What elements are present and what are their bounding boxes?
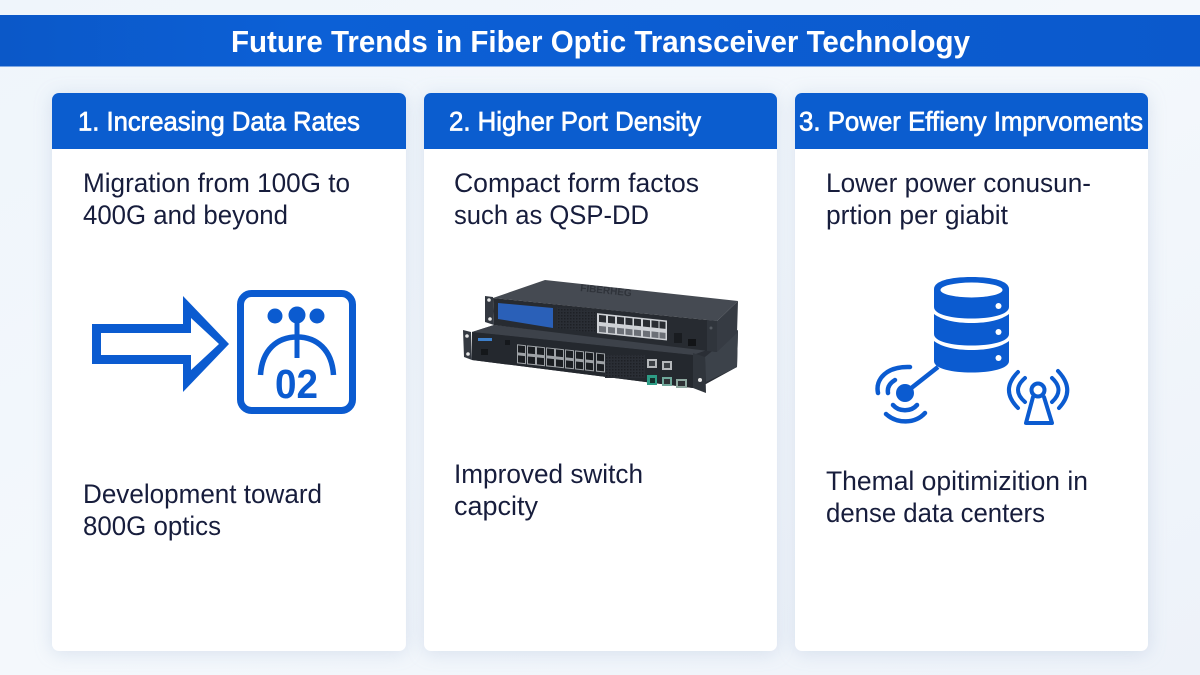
- text: lower power: [826, 168, 1091, 230]
- text: development: [83, 479, 322, 541]
- text: lower power: prtion per giabit: [826, 200, 1009, 230]
- left node with signal waves: [878, 367, 938, 421]
- panel: increasing data rates: [52, 93, 406, 651]
- text: compact form factors: such as QSP-DD: [454, 200, 649, 230]
- database stack: [934, 277, 1009, 372]
- switch logo: FIBERHEG: [580, 283, 632, 299]
- text: compact form factors: [454, 168, 699, 230]
- panel: power efficiency: [795, 93, 1148, 651]
- right antenna with signal waves: [1009, 371, 1067, 423]
- panel 1 header: 1. Increasing Data Rates: [78, 106, 360, 136]
- title bar: [0, 15, 1200, 66]
- text: improved switch capacity: [454, 459, 643, 521]
- text: compact form factors: Compact form factos: [454, 168, 699, 198]
- panel 3 header: 3. Power Effieny Imprvoments: [799, 106, 1143, 136]
- text: thermal optimization: Themal opitimizition in: [826, 466, 1088, 496]
- text: migration: Migration from 100G to: [83, 168, 350, 198]
- text: thermal optimization: dense data centers: [826, 498, 1045, 528]
- text: thermal optimization: [826, 466, 1088, 528]
- text: migration: [83, 168, 350, 230]
- panel 2 header: [424, 93, 777, 149]
- image: stacked network switches: [463, 280, 738, 393]
- icon: 02 gauge box: 02: [275, 361, 318, 407]
- text: lower power: Lower power conusun-: [826, 168, 1091, 198]
- title: Future Trends in Fiber Optic Transceiver Technology: [231, 24, 971, 59]
- text: improved switch capacity: capcity: [454, 491, 539, 521]
- text: improved switch capacity: Improved switch: [454, 459, 643, 489]
- text: development: 800G optics: [83, 511, 221, 541]
- upper switch: [485, 280, 738, 352]
- icon: 02 gauge box: [240, 294, 352, 410]
- icon: right arrow: [92, 296, 229, 392]
- panel 3 header: [795, 93, 1148, 149]
- text: development: Development toward: [83, 479, 322, 509]
- panel 1 header: [52, 93, 406, 149]
- panel 2 header: 2. Higher Port Density: [449, 106, 701, 136]
- text: migration: 400G and beyond: [83, 200, 288, 230]
- lower switch: [463, 325, 738, 393]
- panel: higher port density: [424, 93, 777, 651]
- icon: database with wireless nodes: [878, 277, 1067, 423]
